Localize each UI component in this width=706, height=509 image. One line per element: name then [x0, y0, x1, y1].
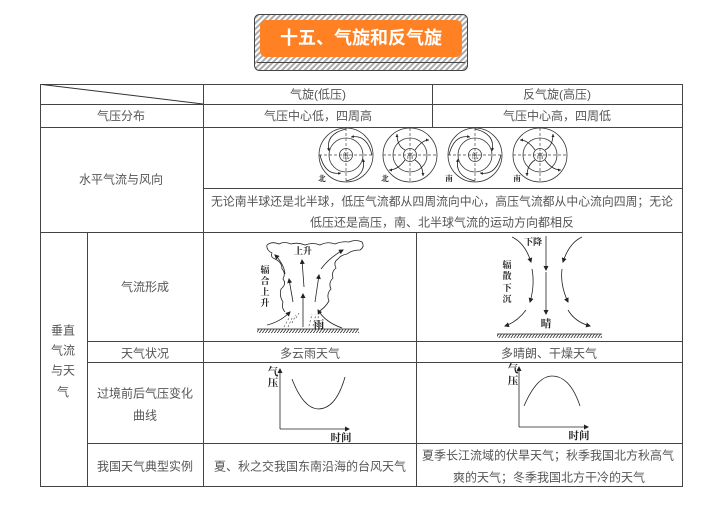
cyclone example: 夏、秋之交我国东南沿海的台风天气 [214, 458, 406, 474]
row label: airflow formation: 气流形成 [121, 279, 169, 294]
line chart: cyclone pressure [268, 365, 352, 444]
row group label: vertical airflow and weather [51, 324, 75, 399]
icon: southern hemisphere cyclone: 南 [445, 173, 453, 183]
anticyclone weather: 多晴朗、干燥天气 [501, 346, 597, 360]
row label: pressure curve: 过境前后气压变化 [97, 386, 193, 400]
icon: northern hemisphere anticyclone: 北 [381, 174, 389, 183]
diagram: anticyclone sinking air: 散 [502, 270, 512, 281]
line chart: anticyclone pressure: 时间 [568, 429, 590, 442]
line chart: anticyclone pressure [508, 362, 590, 442]
column header: cyclone: 气旋(低压) [290, 86, 346, 102]
icon: northern hemisphere cyclone: 低 [342, 152, 350, 160]
anticyclone example [422, 448, 674, 484]
diagram: cyclone rising air: 雨 [314, 318, 325, 331]
title [260, 20, 462, 57]
row label: pressure distribution: 气压分布 [97, 108, 145, 123]
icon: southern hemisphere cyclone [445, 128, 502, 183]
row label: pressure curve [97, 386, 193, 422]
line chart: anticyclone pressure: 气 [508, 362, 519, 375]
line chart: cyclone pressure: 时间 [330, 431, 352, 444]
diagram: cyclone rising air: 辐 [260, 264, 270, 275]
row group label: vertical airflow and weather: 气流 [51, 342, 75, 358]
diagram: cyclone rising air [257, 240, 363, 333]
icon: southern hemisphere anticyclone: 南 [513, 173, 521, 183]
row label: horizontal airflow: 水平气流与风向 [79, 172, 163, 186]
diagram: anticyclone sinking air: 辐 [502, 259, 512, 270]
diagram: cyclone rising air: 合 [260, 275, 270, 286]
diagram: cyclone rising air: 上升 [294, 245, 312, 256]
line chart: cyclone pressure: 气 [268, 365, 279, 378]
anticyclone example: 爽的天气；冬季我国北方干冷的天气 [453, 470, 645, 484]
diagram: cyclone rising air: 升 [260, 297, 270, 308]
explanation text: 无论南半球还是北半球，低压气流都从四周流向中心，高压气流都从中心流向四周；无论 [211, 194, 673, 208]
row label: weather condition: 天气状况 [121, 346, 169, 360]
icon: northern hemisphere anticyclone: 高 [406, 151, 414, 160]
row label: typical examples: 我国天气典型实例 [97, 458, 193, 474]
row group label: vertical airflow and weather: 垂直 [51, 324, 75, 338]
cyclone weather: 多云雨天气 [280, 346, 340, 360]
diagram: anticyclone sinking air: 晴 [541, 317, 552, 330]
cyclone pressure distribution: 气压中心低，四周高 [264, 108, 372, 123]
explanation text: 低压还是高压，南、北半球气流的运动方向都相反 [310, 214, 574, 230]
diagram: anticyclone sinking air: 沉 [502, 294, 512, 304]
row group label: vertical airflow and weather: 气 [57, 384, 69, 399]
icon: southern hemisphere anticyclone [513, 128, 567, 183]
diagram: cyclone rising air: 上 [260, 286, 270, 297]
icon: southern hemisphere anticyclone: 高 [536, 151, 544, 160]
row group label: vertical airflow and weather: 与天 [51, 364, 75, 378]
line chart: anticyclone pressure: 压 [508, 375, 519, 387]
diagram: anticyclone sinking air: 下 [502, 282, 512, 293]
row label: pressure curve: 曲线 [133, 408, 157, 422]
line chart: cyclone pressure: 压 [268, 377, 279, 389]
anticyclone example: 夏季长江流域的伏旱天气；秋季我国北方秋高气 [422, 448, 674, 462]
diagram: anticyclone sinking air [497, 236, 602, 338]
anticyclone pressure distribution: 气压中心高，四周低 [503, 108, 611, 123]
explanation text [211, 194, 673, 230]
diagram: anticyclone sinking air: 下降 [524, 236, 542, 247]
icon: northern hemisphere cyclone [318, 128, 373, 183]
comparison table [40, 84, 682, 486]
icon: northern hemisphere anticyclone [381, 128, 437, 183]
column header: anticyclone: 反气旋(高压) [523, 86, 591, 102]
title: 十五、气旋和反气旋 [280, 28, 442, 48]
icon: northern hemisphere cyclone: 北 [318, 174, 326, 183]
title banner [254, 14, 468, 70]
icon: southern hemisphere cyclone: 低 [472, 152, 478, 160]
